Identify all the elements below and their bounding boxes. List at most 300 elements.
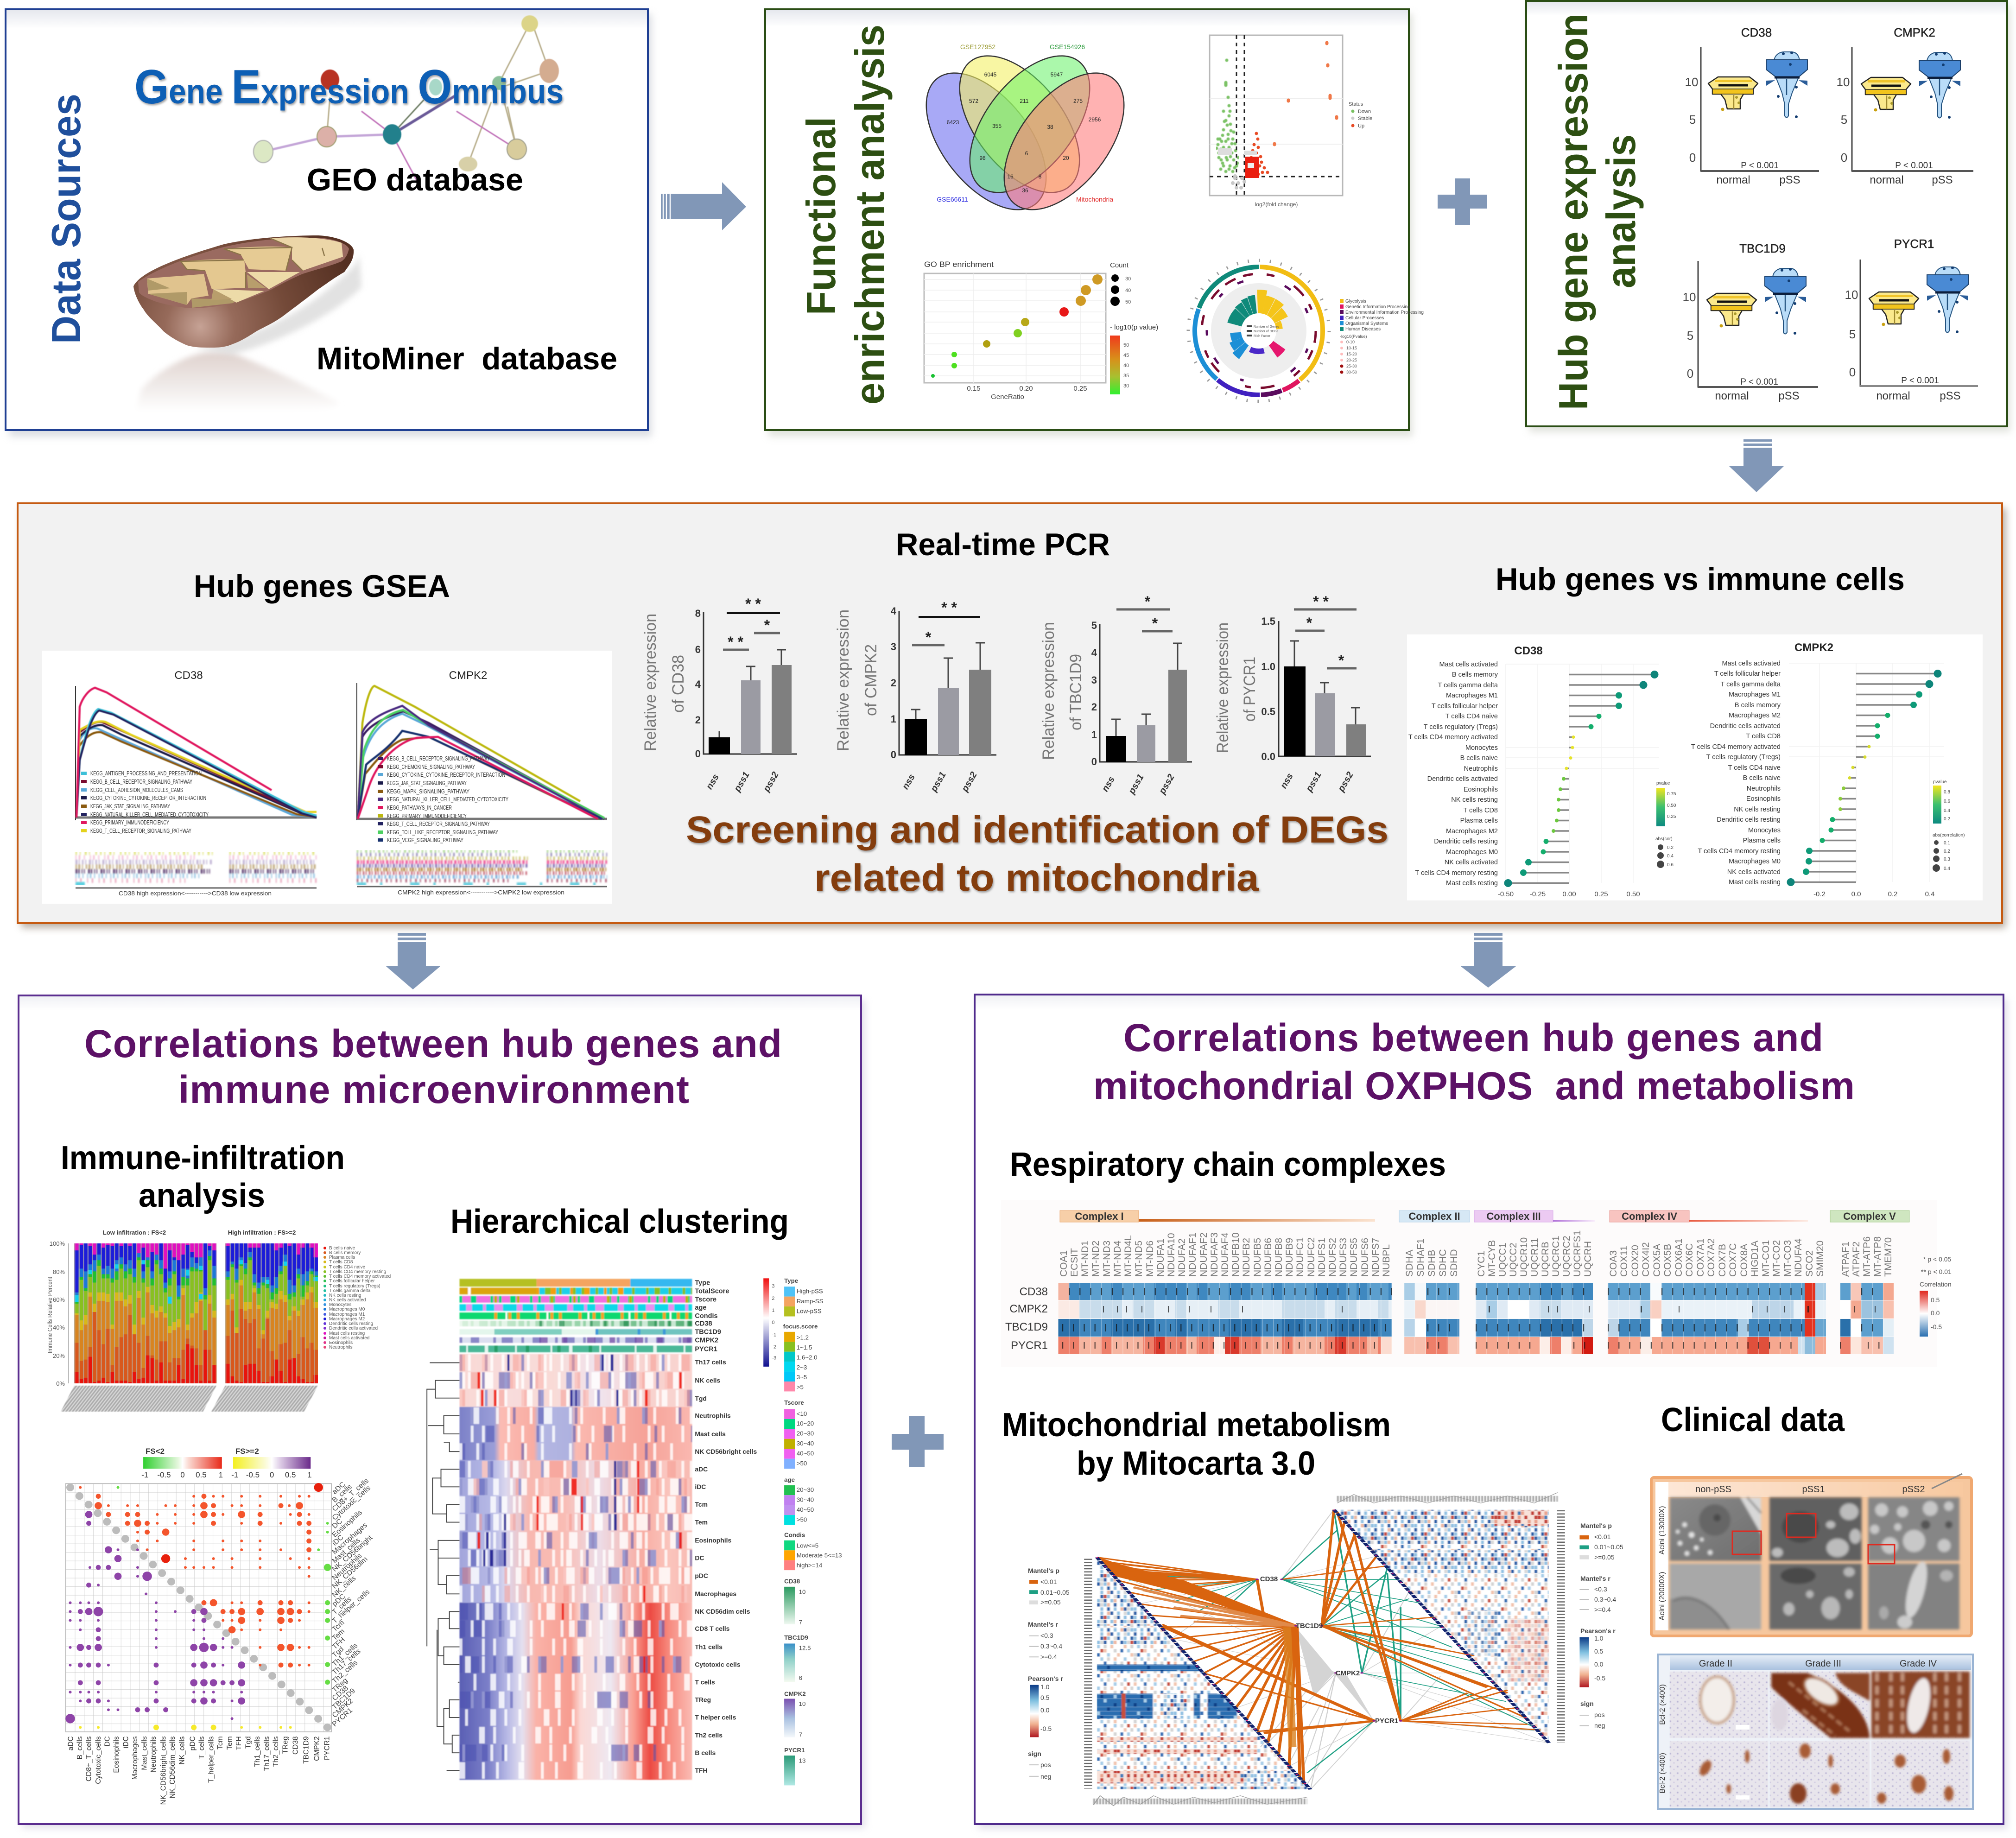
legend: right Mantel: 0.3~0.4 bbox=[1594, 1596, 1616, 1603]
chart: venn diagram: 211 bbox=[1020, 98, 1029, 104]
column labels: Grade II bbox=[1699, 1659, 1732, 1669]
violin: PYCR1 bbox=[1845, 237, 1978, 402]
row labels: T cells follicular helper bbox=[1432, 703, 1498, 710]
grid bbox=[66, 1483, 331, 1732]
center: inner legend: Rich Factor bbox=[1254, 335, 1270, 338]
center: inner legend: Number of DEGs bbox=[1254, 330, 1279, 333]
legend: annotations: 13 bbox=[799, 1757, 805, 1764]
track labels: TBC1D9 bbox=[695, 1329, 721, 1336]
panel: immune microenvironment bbox=[19, 995, 865, 1828]
network hub labels bbox=[1260, 1575, 1398, 1725]
legend: immune cell types: Dendritic cells resting bbox=[329, 1321, 373, 1326]
gene labels: NDUFS5 bbox=[1349, 1238, 1359, 1277]
x labels: pDC bbox=[189, 1736, 197, 1750]
gene labels: SDHC bbox=[1438, 1249, 1448, 1277]
legend: annotations: >50 bbox=[797, 1460, 807, 1467]
legend: CD38 GSEA pathways: KEGG_T_CELL_RECEPTOR_SIGNALING_PATHWAY bbox=[90, 828, 191, 834]
chart: PCR TBC1D9: pss2 bbox=[1157, 773, 1177, 796]
row labels: Cytotoxic cells bbox=[695, 1661, 741, 1668]
chart: venn diagram: 2956 bbox=[1089, 116, 1101, 123]
row labels: T cells regulatory (Tregs) bbox=[1706, 754, 1781, 761]
heading: Functional enrichment analysis: enrichment analysis bbox=[847, 25, 893, 405]
panel: OXPHOS and metabolism bbox=[975, 995, 2007, 1829]
triangle gene labels bbox=[1093, 1499, 1558, 1801]
legend: CD38 GSEA pathways: KEGG_ANTIGEN_PROCESSING_AND_PRESENTATION bbox=[90, 770, 202, 777]
legend: 0.3 bbox=[1944, 857, 1950, 862]
row labels: Mast cells activated bbox=[1439, 661, 1498, 668]
legend: left Mantel: 0.01~0.05 bbox=[1040, 1589, 1070, 1596]
track labels: TotalScore bbox=[695, 1288, 729, 1295]
legend: annotations: focus.score bbox=[783, 1323, 818, 1330]
legend: immune cell types: NK cells resting bbox=[329, 1293, 361, 1298]
y axis: 40% bbox=[53, 1324, 65, 1331]
row labels: Bcl-2 (×400) bbox=[1659, 1753, 1667, 1794]
hub nodes bbox=[1257, 1579, 1401, 1721]
gene labels: COX20 bbox=[1630, 1245, 1641, 1277]
dark blue accents bbox=[483, 1363, 619, 1558]
legend: CMPK2 GSEA pathways bbox=[378, 755, 508, 843]
row labels: T cells CD4 memory resting bbox=[1698, 848, 1781, 855]
legend: count and p value: 50 bbox=[1125, 299, 1131, 305]
legend: CMPK2 GSEA pathways: KEGG_MAPK_SIGNALING_PATHWAY bbox=[387, 788, 470, 795]
chart: CMPK2 GSEA bbox=[357, 669, 607, 896]
chart: PCR CD38: 6 bbox=[695, 644, 701, 655]
gene labels: COX6C bbox=[1684, 1243, 1695, 1277]
gene labels: NDUFA4 bbox=[1793, 1238, 1804, 1277]
scale bars bbox=[1736, 1725, 1750, 1730]
chart: venn diagram: 98 bbox=[979, 155, 986, 161]
legend: immune cell types: NK cells activated bbox=[329, 1298, 366, 1303]
chart: hierarchical clustering heatmap bbox=[427, 1277, 842, 1785]
heading: correlations immune bbox=[84, 1022, 782, 1111]
x ticks: 0.00 bbox=[1562, 890, 1576, 898]
colour scale bbox=[763, 1278, 776, 1367]
x labels: NK_cells bbox=[178, 1736, 186, 1764]
figure: immunohistochemistry bbox=[1658, 1654, 1973, 1809]
legend: right Mantel: <0.3 bbox=[1594, 1585, 1607, 1593]
track labels: Tscore bbox=[695, 1296, 716, 1303]
legend: left Mantel: <0.3 bbox=[1040, 1632, 1053, 1639]
legend: correlation: 0.0 bbox=[1931, 1309, 1940, 1317]
chart: PCR TBC1D9: 3 bbox=[1091, 674, 1097, 686]
right labels: iDC bbox=[331, 1534, 345, 1547]
legend: categories: Glycolysis bbox=[1345, 299, 1366, 304]
legend: 0.4 bbox=[1944, 808, 1950, 813]
row labels: Tem bbox=[695, 1518, 708, 1526]
row labels: Bcl-2 (×400) bbox=[1659, 1684, 1667, 1725]
legend: immune cell types: T cells gamma delta bbox=[329, 1288, 371, 1293]
legend: annotations: 12.5 bbox=[799, 1645, 811, 1652]
heading: immune infiltration analysis: analysis bbox=[139, 1177, 265, 1214]
row labels: Th2 cells bbox=[695, 1731, 723, 1739]
gene labels: SCO2 bbox=[1804, 1250, 1815, 1277]
right labels: NK_CD56bright bbox=[331, 1534, 374, 1573]
y label: of CMPK2 bbox=[862, 644, 880, 716]
legend: annotations: 3~5 bbox=[797, 1374, 807, 1381]
arrow: down to OXPHOS panel bbox=[1461, 933, 1516, 988]
links: gray bbox=[1108, 1509, 1549, 1789]
heat rows bbox=[459, 1354, 692, 1780]
axis labels: 0.15 bbox=[967, 385, 981, 393]
chart: PCR PYCR1: 1.0 bbox=[1261, 661, 1275, 672]
x labels bbox=[67, 1736, 331, 1805]
legend: CMPK2 GSEA pathways: KEGG_CYTOKINE_CYTOKINE_RECEPTOR_INTERACTION bbox=[387, 772, 505, 778]
legend: 0.50 bbox=[1667, 803, 1676, 808]
x labels: Neutrophils bbox=[150, 1736, 158, 1773]
legend: immune cell types: Monocytes bbox=[329, 1302, 351, 1307]
bars: wedges bbox=[1223, 295, 1295, 367]
row labels: Acini (20000X) bbox=[1658, 1572, 1666, 1620]
row labels: Macrophages M0 bbox=[1446, 849, 1498, 856]
gene labels: UQCRH bbox=[1583, 1241, 1593, 1277]
legend: 0.4 bbox=[1667, 854, 1674, 859]
links: orange mass bbox=[1100, 1559, 1297, 1627]
right labels: TFH bbox=[331, 1636, 347, 1651]
chart: PCR TBC1D9: 5 bbox=[1091, 620, 1097, 631]
legend: annotations: 30~40 bbox=[797, 1440, 814, 1447]
legend: immune cell types: Neutrophils bbox=[329, 1345, 353, 1350]
colour key: FS<2 bbox=[146, 1447, 165, 1456]
colour key: -0.5 bbox=[246, 1470, 260, 1479]
legend: annotations: 30~40 bbox=[797, 1496, 814, 1503]
chart: correlation matrix bbox=[66, 1447, 374, 1805]
legend: volcano status: Status bbox=[1349, 101, 1363, 107]
chart: PCR TBC1D9: 0 bbox=[1091, 756, 1097, 767]
legend: annotations bbox=[783, 1277, 842, 1785]
violin: TBC1D9: 0 bbox=[1687, 367, 1693, 380]
gene labels: NDUFA2 bbox=[1177, 1238, 1187, 1277]
legend: count and p value: 40 bbox=[1125, 288, 1131, 293]
legend: volcano status bbox=[1349, 101, 1372, 129]
colour scale: 2 bbox=[772, 1296, 774, 1301]
legend: CD38 GSEA pathways: KEGG_CELL_ADHESION_MOLECULES_CAMS bbox=[90, 787, 183, 793]
legend: immune cell types: T cells CD4 memory resting bbox=[329, 1269, 386, 1274]
gene labels: NDUFB5 bbox=[1252, 1238, 1263, 1277]
stems bbox=[1791, 674, 1938, 882]
gene labels: COX8A bbox=[1739, 1244, 1750, 1277]
violin: TBC1D9 bbox=[1683, 241, 1818, 402]
row labels: Eosinophils bbox=[1464, 786, 1498, 793]
gene labels: ATPAF2 bbox=[1851, 1242, 1862, 1277]
right labels: Mast_cells bbox=[331, 1536, 362, 1565]
chart: PCR PYCR1: 0.5 bbox=[1261, 706, 1275, 717]
legend: volcano status: Up bbox=[1358, 123, 1364, 129]
gene labels: NUBPL bbox=[1381, 1244, 1392, 1277]
arrow: pointer bbox=[1932, 1474, 1962, 1489]
violin: CMPK2: 0 bbox=[1841, 151, 1847, 165]
center: inner legend bbox=[1241, 313, 1280, 349]
x labels: Mast_cells bbox=[140, 1736, 148, 1770]
chart: venn diagram: 355 bbox=[992, 123, 1002, 129]
legend: 0.1 bbox=[1944, 841, 1950, 846]
legend: 0.8 bbox=[1944, 790, 1950, 795]
ring: background bbox=[1226, 298, 1291, 363]
row labels: Neutrophils bbox=[1464, 765, 1498, 773]
legend: annotations: TBC1D9 bbox=[784, 1634, 808, 1641]
legend: significance: 0-10 bbox=[1346, 340, 1355, 344]
chart: PCR TBC1D9: * bbox=[1152, 615, 1158, 632]
row labels: Neutrophils bbox=[695, 1412, 731, 1420]
complex headers: Complex II bbox=[1408, 1211, 1460, 1222]
x labels: B_cells bbox=[76, 1736, 84, 1759]
y label: Relative expression bbox=[834, 609, 852, 751]
y label: Relative expression bbox=[641, 614, 659, 751]
colour scale: -3 bbox=[772, 1355, 776, 1361]
links: orange right bbox=[1282, 1509, 1541, 1730]
row labels: Plasma cells bbox=[1460, 817, 1498, 824]
row labels: Dendritic cells activated bbox=[1427, 775, 1498, 783]
gene labels: ATPAF1 bbox=[1840, 1242, 1851, 1277]
x labels: Tgd bbox=[244, 1736, 253, 1749]
violin: TBC1D9: TBC1D9 bbox=[1739, 241, 1786, 255]
dots: green and yellow edge bbox=[80, 1488, 328, 1727]
legend: annotations: 7 bbox=[799, 1731, 802, 1738]
row labels: T cells CD4 naive bbox=[1445, 713, 1498, 720]
x ticks: 0.25 bbox=[1594, 890, 1608, 898]
chart: venn diagram: 20 bbox=[1063, 155, 1069, 161]
row labels: CMPK2 bbox=[1009, 1303, 1048, 1315]
links: green left bbox=[1114, 1574, 1374, 1773]
legend: annotations: age bbox=[784, 1477, 795, 1483]
x labels: NK_CD56bright_cells bbox=[159, 1736, 168, 1805]
legend: left Mantel: Pearson's r bbox=[1028, 1675, 1063, 1682]
x ticks: 0.4 bbox=[1925, 890, 1934, 898]
right labels: PYCR1 bbox=[331, 1706, 354, 1728]
gene labels: MT-CYB bbox=[1487, 1240, 1497, 1277]
chart: PCR TBC1D9: nss bbox=[1100, 775, 1117, 793]
gene labels: SDHB bbox=[1426, 1250, 1437, 1277]
gene labels: NDUFB8 bbox=[1274, 1238, 1284, 1277]
label: GSE set 3: GSE66611 bbox=[937, 196, 968, 203]
complex headers: Complex V bbox=[1843, 1211, 1896, 1222]
chart: PCR CD38: * bbox=[764, 617, 770, 634]
violin: TBC1D9: pSS bbox=[1778, 390, 1800, 402]
label: MitoMiner database: MitoMiner database bbox=[317, 341, 617, 376]
gene labels: COA3 bbox=[1608, 1250, 1619, 1277]
violin: PYCR1: P < 0.001 bbox=[1901, 376, 1939, 386]
heading: immune infiltration analysis bbox=[61, 1140, 345, 1214]
chart: PCR CD38: * * bbox=[728, 634, 743, 650]
legend: CMPK2 GSEA pathways: KEGG_T_CELL_RECEPTOR_SIGNALING_PATHWAY bbox=[387, 821, 490, 827]
chart: CD38 lollipop: CD38 bbox=[1514, 645, 1543, 657]
chart: PCR TBC1D9: 1 bbox=[1091, 729, 1097, 741]
chart: venn diagram: 5947 bbox=[1051, 71, 1063, 78]
gene labels: SDHA bbox=[1404, 1250, 1415, 1277]
gene labels: COX7B bbox=[1717, 1244, 1728, 1277]
links: orange left bbox=[1097, 1557, 1374, 1784]
chart: PCR PYCR1: nss bbox=[1279, 772, 1295, 790]
violin: PYCR1: normal bbox=[1876, 390, 1910, 402]
white noise columns bbox=[459, 1363, 692, 1770]
axis labels: GeneRatio bbox=[991, 393, 1024, 401]
row labels: DC bbox=[695, 1554, 704, 1562]
heading: immune infiltration analysis: Immune-infiltration bbox=[61, 1140, 345, 1177]
x labels: PYCR1 bbox=[323, 1736, 331, 1760]
legend: right Mantel: Mantel's p bbox=[1580, 1522, 1612, 1529]
chart: CMPK2 GSEA: CMPK2 high expression<----------->CMPK2 low expression bbox=[398, 889, 564, 896]
legend: CD38 GSEA pathways: KEGG_PRIMARY_IMMUNODEFICIENCY bbox=[90, 819, 169, 826]
legend: immune cell types: T cells CD4 memory activated bbox=[329, 1274, 391, 1279]
legend: volcano status: Stable bbox=[1358, 116, 1372, 121]
center: inner legend: Number of Genes bbox=[1254, 325, 1280, 329]
row labels: T cells CD4 memory activated bbox=[1691, 743, 1781, 751]
label: GEO database: GEO database bbox=[307, 162, 523, 197]
row labels: TReg bbox=[695, 1696, 711, 1704]
gene labels: TMEM70 bbox=[1883, 1237, 1894, 1277]
legend: right Mantel: >=0.05 bbox=[1594, 1553, 1615, 1561]
legend: annotations: 20~30 bbox=[797, 1486, 814, 1493]
legend: categories bbox=[1340, 299, 1424, 332]
label: mitochondria set: Mitochondria bbox=[1076, 196, 1113, 203]
legend: count and p value: 40 bbox=[1123, 363, 1129, 368]
legend: annotations: 10 bbox=[799, 1588, 805, 1595]
row labels: T helper cells bbox=[695, 1714, 736, 1721]
ring: significance marks bbox=[1202, 274, 1316, 388]
x labels: NK_CD56dim_cells bbox=[169, 1736, 177, 1799]
row labels: Dendritic cells activated bbox=[1710, 723, 1781, 730]
label: data sources: Data Sources bbox=[43, 94, 89, 344]
gene labels: MT-ND4 bbox=[1112, 1241, 1123, 1277]
panel: screening and identification bbox=[18, 503, 2006, 928]
chart: venn diagram: 36 bbox=[1022, 187, 1028, 194]
legend: categories: Human Diseases bbox=[1345, 327, 1381, 332]
colour scale: 3 bbox=[772, 1284, 774, 1289]
heading: Hub gene expression analysis: Hub gene expression bbox=[1550, 13, 1596, 410]
gene labels: NDUFAF4 bbox=[1220, 1232, 1230, 1277]
legend: CMPK2 GSEA pathways: KEGG_PATHWAYS_IN_CANCER bbox=[387, 805, 452, 811]
gene labels: COX7A1 bbox=[1695, 1238, 1706, 1277]
chart: PCR CD38: nss bbox=[704, 773, 721, 791]
right labels: DC bbox=[331, 1517, 344, 1530]
row labels: Eosinophils bbox=[1746, 795, 1781, 803]
legend: immune cell types: B cells memory bbox=[329, 1250, 361, 1255]
track labels: age bbox=[695, 1304, 706, 1312]
chart: PCR PYCR1: 0.0 bbox=[1261, 751, 1275, 762]
right labels: NK_cells bbox=[331, 1574, 357, 1599]
x labels hatch bbox=[61, 1386, 216, 1412]
y axis bbox=[46, 1240, 65, 1387]
x labels: Cytotoxic_cells bbox=[95, 1736, 102, 1784]
ring: category segments bbox=[1168, 241, 1349, 421]
chart: PCR CMPK2: 3 bbox=[891, 641, 896, 653]
chart: PCR CMPK2: 0 bbox=[891, 749, 896, 761]
legend: right Mantel: sign bbox=[1580, 1700, 1594, 1707]
row labels: NK cells resting bbox=[1451, 796, 1498, 804]
row labels bbox=[1659, 1684, 1667, 1794]
row labels: NK CD56bright cells bbox=[695, 1448, 757, 1455]
row labels: B cells bbox=[695, 1749, 716, 1756]
chart: venn diagram: 275 bbox=[1073, 98, 1083, 104]
heading: clinical data: Clinical data bbox=[1661, 1401, 1845, 1439]
row labels: T cells gamma delta bbox=[1721, 681, 1781, 688]
gene labels: NDUFB2 bbox=[1241, 1238, 1252, 1277]
violin: CD38: CD38 bbox=[1741, 25, 1772, 39]
legend: right Mantel: Mantel's r bbox=[1580, 1575, 1610, 1582]
x labels: Macrophages bbox=[131, 1736, 139, 1780]
row labels: Eosinophils bbox=[695, 1537, 732, 1544]
heading: correlations OXPHOS: mitochondrial OXPHOS and metabolism bbox=[1093, 1064, 1855, 1108]
cell separators and significance marks bbox=[1058, 1292, 1894, 1345]
barcode: CD38 hits bbox=[76, 853, 317, 884]
axis label: volcano x: log2(fold change) bbox=[1255, 201, 1298, 208]
legend: significance: 30-50 bbox=[1346, 370, 1357, 374]
red accents bbox=[477, 1381, 682, 1665]
x labels: CD38 bbox=[292, 1736, 299, 1755]
violin: PYCR1: pSS bbox=[1940, 390, 1961, 402]
gene labels: NDUFAF3 bbox=[1209, 1232, 1220, 1277]
legend: annotations: <10 bbox=[797, 1410, 807, 1417]
pale pink columns bbox=[459, 1363, 692, 1594]
x ticks: -0.2 bbox=[1813, 890, 1826, 898]
track labels: CMPK2 bbox=[695, 1337, 718, 1344]
column labels bbox=[1699, 1659, 1937, 1669]
violin: CD38: 10 bbox=[1685, 75, 1698, 89]
colour scale: 0 bbox=[772, 1320, 774, 1325]
row labels: B cells naive bbox=[1460, 754, 1498, 762]
chart: PCR CMPK2: * * bbox=[941, 599, 957, 616]
violin: CMPK2: 10 bbox=[1837, 75, 1850, 89]
legend: CMPK2 GSEA pathways: KEGG_VEGF_SIGNALING_PATHWAY bbox=[387, 837, 463, 843]
row labels: Macrophages M2 bbox=[1446, 828, 1498, 835]
chart: venn diagram: 16 bbox=[1007, 173, 1014, 180]
y axis: Immune Cells Relative Percent bbox=[46, 1277, 53, 1353]
row labels: Tgd bbox=[695, 1395, 707, 1402]
chart: PCR PYCR1 bbox=[1214, 593, 1371, 794]
legend: immune cell types: Macrophages M1 bbox=[329, 1312, 365, 1317]
gene labels: COA1 bbox=[1059, 1250, 1069, 1277]
x labels: Tcm bbox=[216, 1736, 224, 1749]
legend: CMPK2 GSEA pathways: KEGG_NATURAL_KILLER_CELL_MEDIATED_CYTOTOXICITY bbox=[387, 796, 508, 803]
chart: PCR CMPK2: 4 bbox=[891, 605, 897, 617]
violin: CMPK2: normal bbox=[1870, 174, 1904, 186]
right labels: TBC1D9 bbox=[331, 1687, 357, 1711]
barcode: CMPK2 hits bbox=[357, 851, 607, 884]
chart: PCR CD38: * * bbox=[745, 596, 761, 612]
heading: correlations immune: immune microenvironment bbox=[178, 1068, 689, 1111]
chart: PCR PYCR1: * * bbox=[1313, 593, 1329, 610]
highlight boxes bbox=[1732, 1514, 1895, 1564]
legend: left Mantel: 0.5 bbox=[1040, 1694, 1050, 1701]
legend: annotations: 7 bbox=[799, 1619, 802, 1626]
legend: 0.25 bbox=[1667, 814, 1676, 819]
chart: CD38 lollipop bbox=[1408, 645, 1676, 898]
chart: PCR CMPK2: pss2 bbox=[959, 770, 979, 794]
legend: CMPK2 GSEA pathways: KEGG_CHEMOKINE_SIGNALING_PATHWAY bbox=[387, 764, 475, 770]
chart: PCR TBC1D9: 2 bbox=[1091, 701, 1097, 713]
heading: correlations immune: Correlations between hub genes and bbox=[84, 1022, 782, 1065]
arrow: down to screening panel bbox=[1729, 439, 1784, 492]
gene labels: MT-CO3 bbox=[1782, 1240, 1793, 1277]
chart: PCR PYCR1: pss1 bbox=[1304, 770, 1324, 794]
colour key: -1 bbox=[141, 1470, 148, 1479]
x labels: CMPK2 bbox=[313, 1736, 321, 1761]
chart: CD38 GSEA bbox=[76, 669, 317, 897]
colour key: 1 bbox=[219, 1470, 223, 1479]
legend: 0.75 bbox=[1667, 792, 1676, 797]
panel: hub gene expression analysis bbox=[1526, 1, 2010, 432]
x ticks: 0.0 bbox=[1851, 890, 1861, 898]
gene labels: NDUFB10 bbox=[1230, 1232, 1241, 1277]
gene labels: MT-CO2 bbox=[1771, 1240, 1782, 1277]
legend: left Mantel: >=0.4 bbox=[1040, 1653, 1057, 1661]
y label bbox=[834, 609, 880, 751]
legend: annotations: 2~3 bbox=[797, 1364, 807, 1371]
column labels: Grade IV bbox=[1900, 1659, 1937, 1669]
legend: 0.2 bbox=[1944, 817, 1950, 822]
legend: categories: Genetic Information Processing bbox=[1345, 304, 1410, 310]
legend: annotations: >1.2 bbox=[797, 1334, 809, 1341]
violin: TBC1D9: normal bbox=[1715, 390, 1749, 402]
